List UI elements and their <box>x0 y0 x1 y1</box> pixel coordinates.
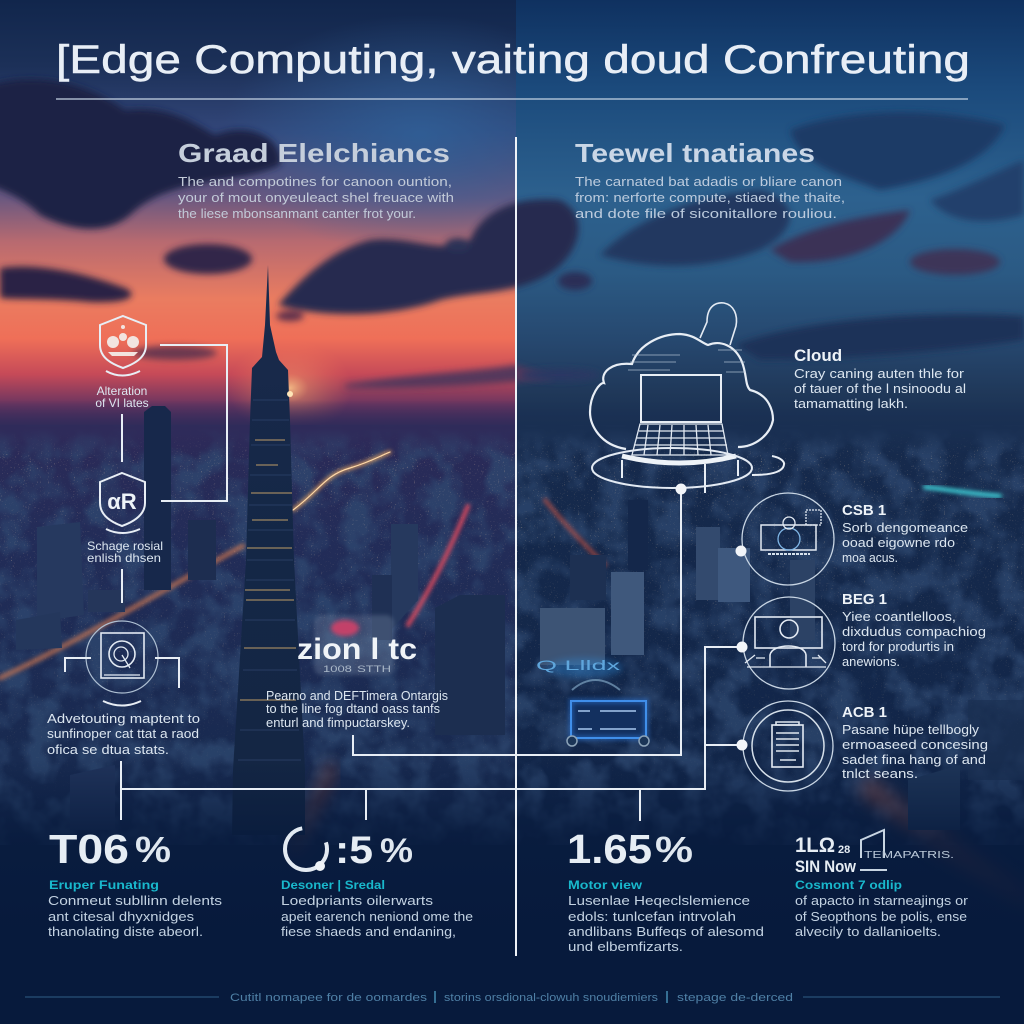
text: ACB 1: ermoaseed concesing <box>842 738 988 752</box>
stat: T06: Conmeut subllinn delents <box>48 893 223 908</box>
stat: mixed figure: alvecily to dallanioelts. <box>795 924 941 939</box>
sun glow <box>228 340 352 436</box>
stat: 1.65: 1.65 <box>567 826 652 872</box>
text: search description <box>47 711 200 757</box>
title: [Edge Computing, vaiting doud Confreuting <box>56 38 970 82</box>
text: cloud: of tauer of the l nsinoodu al <box>794 382 966 396</box>
icon: shield code <box>100 473 145 533</box>
stat: mixed figure: Cosmont 7 odlip <box>795 878 902 892</box>
description: enturl and fimpuctarskey. <box>266 716 410 730</box>
text: CSB 1: CSB 1 <box>842 502 886 519</box>
bottom dark fade <box>0 760 1024 940</box>
stat: T06: Eruper Funating <box>49 878 159 892</box>
clouds right <box>520 112 1024 381</box>
skyline buildings <box>16 406 1024 830</box>
text: cloud: tamamatting lakh. <box>794 397 908 411</box>
stat: ring 5: Desoner | Sredal <box>281 878 385 892</box>
intro text left <box>178 175 454 221</box>
stat: ring 5: fiese shaeds and endaning, <box>281 924 456 939</box>
text: cloud <box>794 346 966 411</box>
ghost device <box>314 615 394 675</box>
footer: storins orsdional-clowuh snoudiemiers <box>444 992 659 1004</box>
text: BEG 1: Yiee coantlelloos, <box>842 610 956 624</box>
stat: T06: T06 <box>49 826 129 872</box>
text: search description: Advetouting maptent to <box>47 711 200 726</box>
stat: 1.65: % <box>655 829 693 870</box>
text: BEG 1: BEG 1 <box>842 591 887 608</box>
footer: Cutitl nomapee for de oomardes <box>230 992 428 1004</box>
icon: blue glowing device: Q Llldx <box>536 657 620 673</box>
stat: 1.65 <box>567 826 764 954</box>
icon label 1: of VI lates <box>95 396 149 410</box>
stat: ring 5: :5 <box>335 829 373 872</box>
laptop screen <box>641 375 721 422</box>
stat: 1.65: andlibans Buffeqs of alesomd <box>568 924 764 939</box>
stat: T06: ant citesal dhyxnidges <box>48 909 195 924</box>
stat: ring 5: Loedpriants oilerwarts <box>281 893 434 908</box>
text: ACB 1 <box>842 704 988 781</box>
big label: zion l tc <box>297 633 417 666</box>
roads glowing <box>0 452 1024 900</box>
stat: T06: % <box>135 829 171 870</box>
intro text left: The and compotines for canoon ountion, <box>178 175 452 189</box>
stat: 1.65: edols: tunlcefan intrvolah <box>568 909 736 924</box>
sky: twilight right <box>516 0 1024 440</box>
clouds left <box>0 79 579 388</box>
stat: mixed figure: 1LΩ <box>795 834 835 857</box>
stat: ring 5: apeit earench neniond ome the <box>281 909 473 924</box>
text: BEG 1: anewions. <box>842 655 900 669</box>
heading right: Teewel tnatianes <box>575 138 815 168</box>
description <box>266 689 448 730</box>
heading left: Graad Elelchiancs <box>178 138 450 168</box>
stat: mixed figure: of apacto in starneajings or <box>795 893 969 908</box>
text: ACB 1: sadet fina hang of and <box>842 753 986 767</box>
stat: ring 5: % <box>380 832 413 870</box>
stat: mixed figure <box>795 830 969 939</box>
icon: blue glowing device <box>536 657 649 746</box>
city ground <box>0 425 516 1024</box>
panel: right heading block <box>575 138 845 221</box>
icon: search target <box>65 621 179 706</box>
footer <box>25 991 1000 1004</box>
icon: shield code: αR <box>107 489 137 514</box>
person outline <box>700 303 736 345</box>
text: CSB 1: Sorb dengomeance <box>842 521 968 535</box>
callout: central label <box>266 615 448 730</box>
stat: 1.65: und elbemfizarts. <box>568 939 683 954</box>
icon label 2: enlish dhsen <box>87 551 161 565</box>
icon: cloud with laptop <box>590 303 784 494</box>
stat: T06: thanolating diste abeorl. <box>48 924 203 939</box>
description: to the line fog dtand oass tanfs <box>266 702 440 716</box>
platform <box>622 456 736 463</box>
cloud outline <box>590 334 773 449</box>
intro text right: The carnated bat adadis or bliare canon <box>575 175 842 189</box>
stat: mixed figure: TEMAPATRIS. <box>864 849 954 861</box>
text: ACB 1: Pasane hüpe tellbogly <box>842 723 980 737</box>
text: ACB 1: ACB 1 <box>842 704 887 721</box>
intro text right <box>575 175 845 221</box>
footer: stepage de-derced <box>677 992 793 1004</box>
panel: left heading block <box>178 138 454 221</box>
small sublabel: 1008 STTH <box>323 664 391 674</box>
intro text right: from: nerforte compute, stiaed the thaite, <box>575 191 845 205</box>
text: BEG 1: tord for produrtis in <box>842 640 954 654</box>
stat: mixed figure: SIN Now <box>795 857 857 876</box>
stat: T06 <box>48 826 223 939</box>
horizon haze <box>0 400 516 456</box>
text: cloud: Cloud <box>794 346 842 365</box>
icon label 2 <box>87 539 163 565</box>
text: cloud: Cray caning auten thle for <box>794 367 964 381</box>
icon label 1 <box>95 384 149 410</box>
stat: 1.65: Lusenlae Heqeclslemience <box>568 893 750 908</box>
laptop keyboard <box>632 424 728 455</box>
icon label 2: Schage rosial <box>87 539 163 553</box>
text: CSB 1: moa acus. <box>842 551 898 565</box>
stat: mixed figure: 28 <box>838 844 850 856</box>
stat: 1.65: Motor view <box>568 878 643 892</box>
icon: shield network <box>100 316 146 376</box>
intro text left: your of mout onyeuleact shel freuace with <box>178 191 454 205</box>
sky: sunset left <box>0 0 516 440</box>
stat: ring 5 <box>281 828 473 939</box>
text: search description: ofica se dtua stats. <box>47 742 169 757</box>
stat: mixed figure: of Seopthons be polis, ense <box>795 909 967 924</box>
central divider <box>515 137 517 956</box>
connection dot <box>676 484 686 494</box>
skyscraper tower <box>232 265 305 835</box>
intro text left: the liese mbonsanmant canter frot your. <box>178 207 416 221</box>
text: CSB 1: ooad eigowne rdo <box>842 536 955 550</box>
text: ACB 1: tnlct seans. <box>842 767 918 781</box>
description: Pearno and DEFTimera Ontargis <box>266 689 448 703</box>
text: BEG 1 <box>842 591 986 669</box>
intro text right: and dote file of siconitallore rouliou. <box>575 207 837 221</box>
icon: camera circle <box>736 493 834 585</box>
icon label 1: Alteration <box>97 384 147 398</box>
red glow sign <box>331 620 359 636</box>
icon: document circle <box>736 701 833 791</box>
icon: user at monitor circle <box>736 597 835 689</box>
title rule <box>56 98 968 100</box>
text: BEG 1: dixdudus compachiog <box>842 625 986 639</box>
edge connector lines <box>120 345 742 821</box>
text: search description: sunfinoper cat ttat a raod <box>47 726 199 741</box>
text: CSB 1 <box>842 502 968 565</box>
